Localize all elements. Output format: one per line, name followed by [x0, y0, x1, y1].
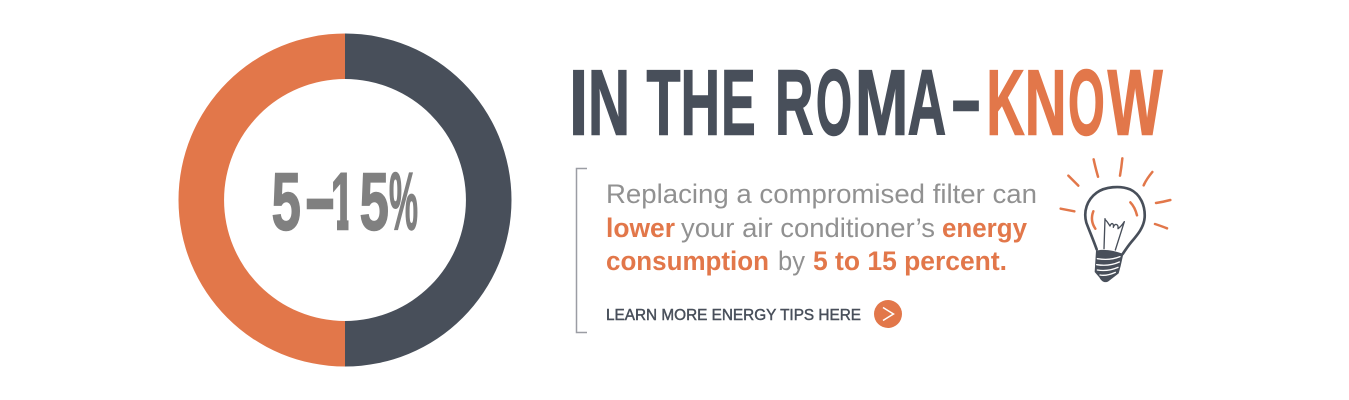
body text: energy	[942, 213, 1027, 243]
link: learn more: LEARN MORE ENERGY TIPS HERE	[606, 307, 861, 324]
title	[569, 47, 1163, 154]
title: N	[1025, 50, 1067, 154]
title: T	[646, 50, 680, 154]
body text: by	[778, 246, 805, 276]
title: I	[569, 50, 588, 154]
donut chart: 5	[360, 156, 389, 248]
donut chart: 5	[272, 156, 301, 248]
title: A	[908, 50, 946, 154]
title: K	[986, 50, 1024, 154]
title: –	[952, 47, 980, 151]
body text: your air conditioner’s	[681, 213, 935, 243]
title: M	[855, 50, 908, 154]
title: N	[588, 50, 630, 154]
title: O	[816, 50, 852, 154]
title: E	[721, 50, 756, 154]
bulb screw base	[1095, 250, 1123, 282]
body text: consumption	[606, 246, 769, 276]
title: O	[1068, 50, 1105, 154]
icon: light bulb	[1061, 158, 1170, 282]
donut chart	[178, 34, 512, 366]
body text: 5 to 15 percent.	[813, 246, 1007, 276]
title: W	[1108, 50, 1163, 154]
donut chart: %	[389, 156, 418, 248]
donut chart: –	[306, 153, 334, 244]
icon: arrow button	[874, 300, 902, 328]
donut chart: 1	[330, 156, 354, 248]
body text: lower	[606, 213, 675, 243]
bracket	[576, 168, 587, 332]
title: H	[681, 50, 720, 154]
body text	[606, 179, 1037, 276]
title: R	[775, 50, 814, 154]
body text: Replacing a compromised filter can	[606, 179, 1037, 209]
